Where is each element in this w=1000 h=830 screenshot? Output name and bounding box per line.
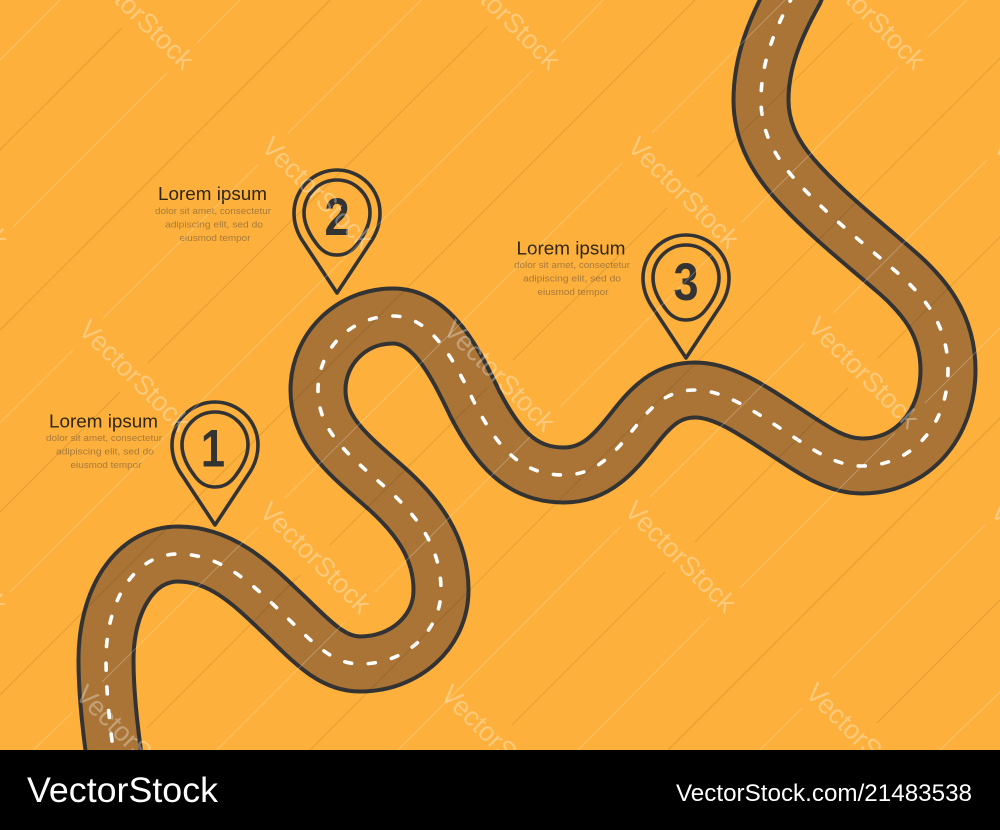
body text 3 — [514, 260, 630, 298]
body text 3: adipiscing elit, sed do — [523, 274, 621, 284]
text block 3 — [514, 238, 630, 298]
map pin 1: 1 — [201, 419, 225, 479]
infographic canvas: VectorStock — [435, 679, 558, 803]
footer logo text: VectorStock — [27, 771, 219, 810]
infographic canvas: VectorStock — [802, 311, 925, 435]
body text 2: dolor sit amet, consectetur — [155, 206, 271, 217]
map pin 3 — [643, 235, 729, 358]
body text 2 — [155, 206, 271, 244]
footer url text: VectorStock.com/21483538 — [676, 780, 972, 807]
infographic canvas: VectorStock — [256, 131, 379, 255]
body text 1 — [46, 433, 162, 471]
road outline — [106, 0, 948, 770]
body text 3: eiusmod tempor — [538, 287, 608, 298]
map pin 2 — [294, 170, 380, 293]
map pin 3: 3 — [673, 253, 699, 312]
body text 3: dolor sit amet, consectetur — [514, 260, 630, 271]
infographic canvas: VectorStock — [622, 131, 745, 255]
body text 2: adipiscing elit, sed do — [165, 220, 263, 230]
text block 2 — [155, 184, 271, 244]
body text 1: eiusmod tempor — [70, 460, 142, 471]
map pin 1 — [172, 402, 258, 525]
winding road — [106, 0, 948, 770]
body text 2: eiusmod tempor — [180, 233, 250, 244]
infographic canvas: VectorStock — [73, 314, 196, 438]
heading 2: Lorem ipsum — [158, 184, 267, 204]
road centre dashes — [106, 0, 948, 770]
infographic canvas: VectorStock — [254, 496, 377, 620]
heading 3: Lorem ipsum — [516, 238, 626, 258]
infographic canvas: VectorStock — [619, 495, 742, 619]
text block 1 — [46, 412, 162, 471]
footer bar — [0, 750, 1000, 830]
body text 1: dolor sit amet, consectetur — [46, 433, 162, 444]
map pin 2: 2 — [324, 188, 350, 247]
infographic canvas: VectorStock — [70, 679, 193, 803]
road surface — [106, 0, 948, 770]
infographic canvas: VectorStock — [800, 677, 923, 801]
heading 1: Lorem ipsum — [49, 412, 158, 432]
infographic canvas: VectorStock — [438, 314, 561, 438]
body text 1: adipiscing elit, sed do — [56, 446, 154, 458]
